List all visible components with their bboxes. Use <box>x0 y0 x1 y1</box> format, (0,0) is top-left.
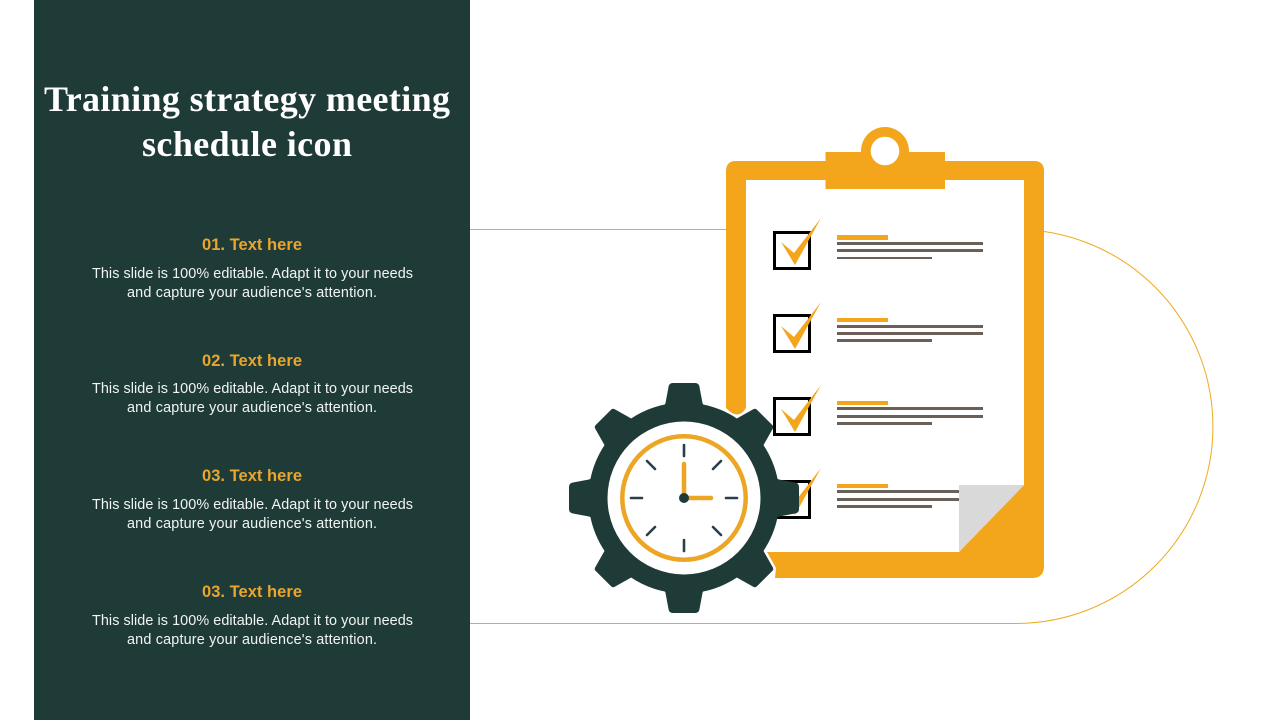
rounded gold connector outline <box>470 230 1213 624</box>
title <box>44 79 450 164</box>
text block: item 2: and capture your audience's attention. <box>127 400 377 416</box>
text block: item 4: and capture your audience's attention. <box>127 632 377 648</box>
checklist row 1 <box>774 218 983 268</box>
icon: gear with clock <box>569 383 799 613</box>
checklist row 4 <box>774 468 983 518</box>
clock ticks <box>631 445 737 551</box>
text block: item 2: This slide is 100% editable. Adapt it to your needs <box>92 381 413 397</box>
title: Training strategy meeting <box>44 79 450 119</box>
folded page corner <box>959 485 1024 552</box>
clock centre <box>679 493 689 503</box>
text block: item 1: and capture your audience's attention. <box>127 285 377 301</box>
clock hands <box>684 464 711 498</box>
checklist row 2 <box>774 302 983 352</box>
clock ring <box>622 436 746 560</box>
clock face <box>608 422 760 574</box>
text block: item 3: and capture your audience's attention. <box>127 516 377 532</box>
text block: item 4: 03. Text here <box>202 583 302 601</box>
icon: clipboard <box>726 127 1044 578</box>
text block: item 3 <box>92 467 413 532</box>
panel: left dark sidebar <box>34 0 470 720</box>
checklist row 3 <box>774 385 983 434</box>
text block: item 1: 01. Text here <box>202 236 302 254</box>
text block: item 2 <box>92 352 413 416</box>
text block: item 1 <box>92 236 413 301</box>
clipboard frame <box>726 161 1044 578</box>
text block: item 1: This slide is 100% editable. Adapt it to your needs <box>92 266 413 282</box>
text block: item 4 <box>92 583 413 648</box>
text block: item 3: 03. Text here <box>202 467 302 485</box>
paper sheet <box>746 180 1024 552</box>
clipboard clip <box>826 127 945 189</box>
text block: item 3: This slide is 100% editable. Adapt it to your needs <box>92 497 413 513</box>
gear <box>569 383 799 613</box>
title: schedule icon <box>142 124 352 164</box>
text block: item 4: This slide is 100% editable. Adapt it to your needs <box>92 613 413 629</box>
text block: item 2: 02. Text here <box>202 352 302 370</box>
